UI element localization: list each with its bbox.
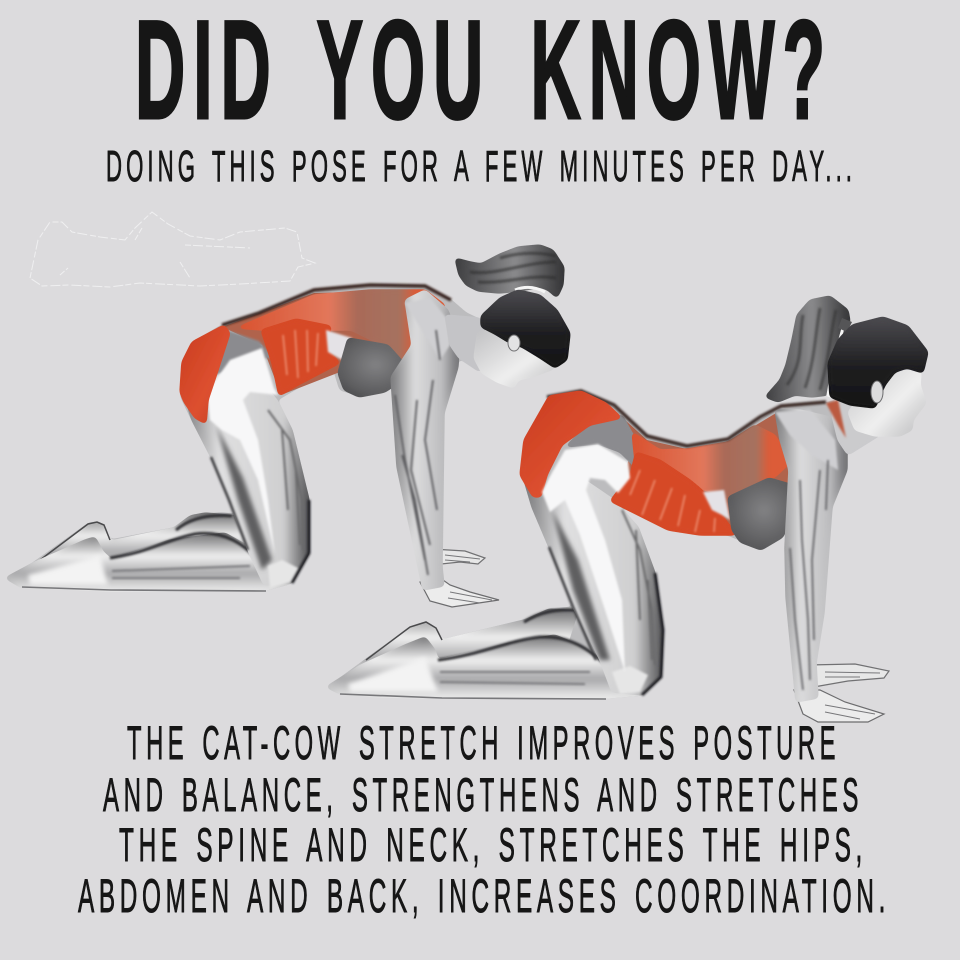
far calf and foot [345,609,578,680]
far calf and foot [33,513,262,570]
ponytail [765,296,852,402]
serratus white patch [326,330,352,360]
head and face [474,290,570,388]
ponytail [455,245,564,298]
glute (red) [520,391,622,497]
body silhouette [328,392,875,698]
serratus white patch [703,490,730,520]
body silhouette [7,287,485,590]
figure: cat pose [5,245,570,607]
thigh [522,470,663,695]
figure: cow pose [326,296,928,722]
neck [445,315,490,372]
oblique muscles (red) [261,319,340,396]
lumbar and lat muscles [547,391,826,497]
far hand [808,664,889,688]
near lower leg and foot [326,635,645,699]
near lower leg and foot [5,533,300,591]
head and face [828,317,928,436]
near hand [794,690,884,722]
white scribble outline artefact [30,212,315,287]
far hand [432,549,485,565]
arm [775,410,847,702]
white hip and thigh band [542,444,630,672]
torso top muscles (trapezius and latissimus) [222,285,451,372]
breast [728,478,800,550]
breast [338,338,413,397]
arm [391,290,459,590]
grey hip muscle [212,330,274,376]
glute (red) [180,325,230,424]
near hand [420,575,499,607]
neck [832,395,880,455]
body text [78,716,890,922]
oblique muscles (red) [610,452,737,535]
thigh [181,370,309,588]
grey hip muscle [565,415,640,472]
torso underlay [222,290,445,395]
white hip and thigh band [207,348,278,555]
torso underlay [614,410,800,540]
